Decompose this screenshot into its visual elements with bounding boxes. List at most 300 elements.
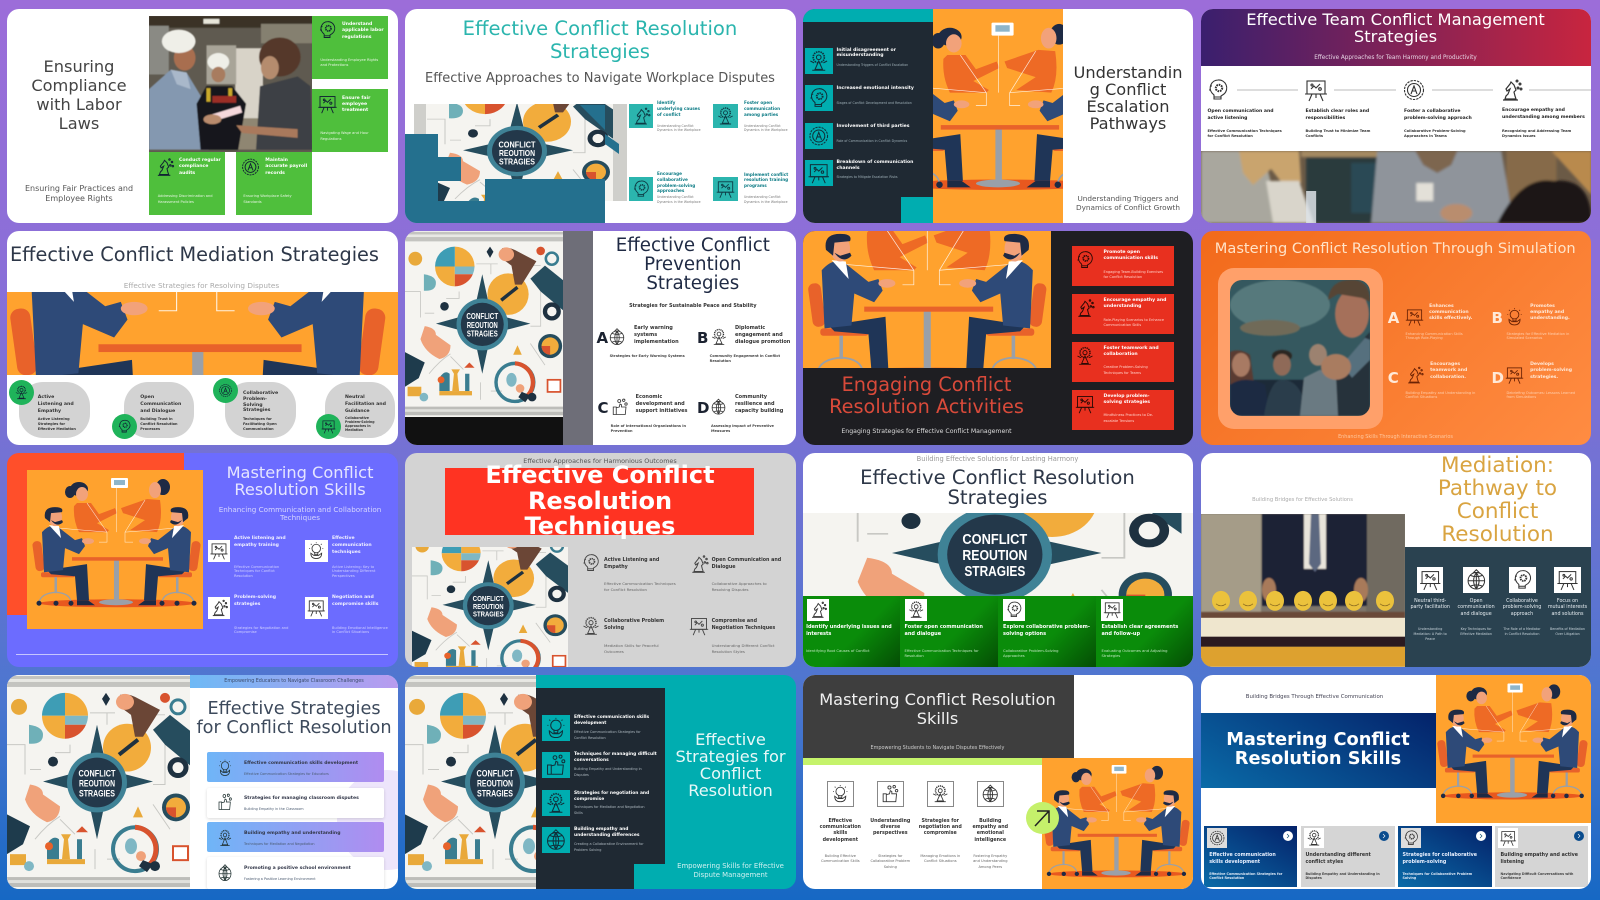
title [616, 237, 770, 293]
text [38, 416, 76, 432]
text [320, 58, 378, 67]
heading [234, 594, 276, 608]
text: Effective Mediation [38, 426, 76, 430]
icon [1504, 307, 1524, 327]
heading: Maintain [265, 158, 288, 163]
title: Pathways [1090, 114, 1166, 133]
text [904, 648, 979, 658]
gray band [563, 231, 593, 445]
text: Creative Problem-Solving [1104, 365, 1148, 369]
text [1104, 413, 1153, 424]
icon box [877, 781, 904, 807]
heading [836, 48, 896, 58]
illustration: conflict poster: REOUTION [79, 778, 115, 789]
text: Navigating Wage and Hour [320, 131, 369, 135]
heading: Foster a collaborative [1404, 109, 1461, 114]
lime band [802, 758, 1042, 765]
text: Dynamics Issues [1502, 134, 1536, 138]
card 2 [1300, 826, 1394, 887]
photo frame [1218, 268, 1382, 429]
text [1102, 648, 1167, 658]
label: Understanding [870, 818, 910, 824]
heading [1104, 250, 1158, 263]
label: and solutions [1551, 612, 1584, 617]
icon: handshake [611, 398, 629, 416]
text [657, 195, 701, 204]
heading [604, 558, 659, 572]
heading: Identify underlying issues and [806, 624, 892, 630]
heading [179, 158, 221, 176]
icon badge 2 [112, 414, 136, 439]
text [345, 416, 375, 432]
heading: interests [806, 631, 831, 637]
text: Effective Communication Strategies for Educators [244, 772, 329, 776]
label: empathy and [973, 825, 1008, 830]
icon card [1463, 567, 1489, 593]
text: Dynamics in the Workplace [744, 200, 788, 204]
text: Fostering Empathy [973, 854, 1007, 858]
illustration: table close-up [7, 292, 398, 375]
heading [265, 158, 307, 176]
icon tile [542, 752, 570, 778]
heading [234, 535, 286, 549]
title: Effective [695, 730, 766, 748]
letter C: C [1388, 369, 1399, 387]
text [744, 195, 788, 204]
subtitle: Enhancing Communication and Collaboration [219, 505, 381, 514]
text: Approaches in [345, 424, 371, 428]
heading: teamwork and [1430, 368, 1467, 373]
title: Resolution Skills [234, 480, 366, 499]
heading: Explore collaborative problem- [1003, 624, 1090, 630]
title: Compliance [31, 76, 127, 95]
text: Mediation Skills for Peaceful [604, 643, 659, 648]
title: Pathway to [1438, 476, 1557, 500]
title: Effective Conflict [485, 461, 715, 489]
text: Outcomes [604, 649, 624, 654]
heading: of conflict [657, 112, 681, 117]
text [1104, 365, 1148, 376]
subtitle: Empowering Skills for Effective [677, 862, 784, 870]
green column 4 [1096, 596, 1193, 667]
card: Open Communication [124, 382, 194, 438]
text: Understanding Different [332, 569, 375, 573]
subtitle: Strategies for Sustainable Peace and Stability [629, 303, 757, 309]
text [1500, 872, 1573, 880]
text: Among Peers [978, 865, 1002, 869]
label: negotiation and [919, 825, 962, 830]
text [574, 805, 645, 817]
green column 1 [802, 596, 900, 667]
text: Understanding Conflict [657, 195, 694, 199]
heading [345, 395, 386, 416]
heading: Communication [140, 402, 181, 407]
heading: collaboration. [1430, 375, 1466, 380]
heading: skills development [1209, 860, 1260, 865]
heading: Effective communication [1209, 853, 1276, 858]
text: Identifying Root Causes of Conflict [806, 648, 870, 652]
heading: channels [836, 166, 860, 171]
heading: Building empathy and understanding [244, 831, 340, 836]
heading: records [265, 171, 285, 176]
text: Active Listening: Key to [332, 564, 374, 568]
title: for Conflict Resolution [196, 718, 392, 738]
heading [1104, 346, 1159, 358]
text: Techniques for Teams [1104, 371, 1141, 375]
red banner [445, 468, 754, 535]
letter A: A [596, 329, 608, 347]
icon card [1100, 599, 1123, 621]
text [657, 124, 701, 132]
label [1410, 599, 1450, 612]
heading: communication skills [1104, 256, 1158, 261]
text: Understanding Conflict [657, 124, 694, 128]
text: Conflict Resolution [574, 736, 606, 740]
icon [1074, 346, 1094, 366]
top text: Effective Approaches for Harmonious Outcomes [523, 457, 677, 465]
subtitle: Effective Approaches to Navigate Workplace Disputes [425, 70, 775, 86]
title [675, 730, 786, 799]
icon tile 2 [805, 85, 832, 111]
icon card [1417, 567, 1443, 593]
illustration: conflict poster: STRAGIES [467, 330, 498, 339]
heading [735, 394, 783, 415]
label: Open [1470, 599, 1482, 604]
text: Managing Emotions in [920, 854, 960, 858]
text [712, 581, 767, 593]
heading: and dialogue [904, 631, 941, 637]
heading: communication [1429, 310, 1469, 315]
icon card [208, 540, 230, 562]
icon card [905, 599, 927, 621]
panel: Ensuring Compliance with Labor Laws [7, 8, 398, 222]
text [234, 626, 288, 635]
text: Building Empathy and Understanding in [1406, 390, 1475, 394]
card: Neutral Facilitation [325, 382, 395, 438]
dark header [802, 675, 1074, 758]
heading [1530, 362, 1572, 381]
text: Dynamics in the Workplace [657, 200, 701, 204]
title: with Labor [36, 95, 122, 114]
subtitle: Engaging Strategies for Effective Conflict Management [841, 428, 1012, 435]
heading: accurate payroll [265, 164, 307, 169]
letter B: B [1492, 309, 1503, 327]
connector lines [1237, 90, 1591, 91]
icon [581, 553, 601, 573]
panel: Effective Conflict Resolution Strategies green [802, 453, 1193, 667]
icon tile 1 [628, 104, 653, 128]
text: Problem-Solving [345, 420, 375, 424]
heading [836, 160, 914, 171]
title: Mediation: [1441, 453, 1554, 478]
title: Resolution Activities [829, 395, 1024, 418]
text [1406, 390, 1475, 399]
heading [1404, 108, 1472, 121]
icon badge 4 [316, 414, 340, 439]
label: Collaborative [1506, 599, 1538, 604]
illustration: conflict poster: REOUTION [467, 321, 498, 330]
heading: conversations [574, 758, 609, 763]
heading: Negotiation Techniques [712, 626, 775, 631]
icon tile [542, 827, 570, 853]
text: Techniques for Collaborative Problem [1402, 872, 1472, 876]
text: Key Techniques for [1461, 626, 1492, 630]
red block [7, 453, 184, 615]
heading: Diplomatic [735, 324, 765, 330]
arrow badge [1476, 831, 1486, 841]
icon [689, 616, 709, 636]
title: Strategies [1354, 27, 1437, 46]
heading: Develop problem- [1104, 394, 1150, 399]
text: Standards [243, 200, 262, 204]
icon: chess knight [158, 158, 174, 176]
title: Prevention [644, 254, 741, 275]
dark info panel [1404, 547, 1591, 667]
heading: Active [38, 395, 54, 400]
text: Harassment Policies [158, 200, 194, 204]
letter C: C [598, 399, 609, 417]
black base [405, 417, 563, 445]
heading [38, 395, 74, 416]
text: Understanding Conflict [744, 195, 781, 199]
title: Ensuring [44, 57, 114, 76]
icon [216, 793, 232, 811]
icon card [1554, 567, 1581, 593]
heading: conflict styles [1306, 860, 1343, 865]
title [1074, 62, 1182, 133]
heading [1306, 108, 1369, 121]
title: Understandin [1074, 62, 1182, 82]
green column 2 [900, 596, 998, 667]
arrow badge [1379, 831, 1389, 841]
top band [190, 675, 398, 688]
icon card [208, 597, 230, 619]
heading [574, 827, 639, 839]
photo: man pointing [1230, 280, 1370, 416]
text: Effective Communication [234, 564, 279, 568]
illustration: conflict poster: STRAGIES [477, 788, 513, 799]
text: Building Empathy in the Classroom [244, 807, 304, 811]
illustration: compass close-up: CONFLICT [962, 531, 1027, 548]
heading: Implement conflict [744, 172, 788, 176]
text [574, 842, 644, 854]
text: Role of International Organizations in [611, 424, 686, 428]
text: Resolution Styles [712, 649, 745, 654]
heading: empathy training [234, 543, 279, 548]
heading [1429, 304, 1472, 323]
title [1438, 454, 1557, 546]
heading [604, 619, 664, 633]
illustration: meeting [802, 231, 1050, 368]
text: Techniques for Mediation and Negotiation [244, 842, 315, 846]
text [710, 354, 780, 364]
icon [1209, 79, 1228, 100]
title: Conflict [1457, 498, 1538, 524]
text: for Conflict Resolution [604, 587, 647, 592]
text: Effective Mediation [1460, 632, 1492, 636]
heading [243, 391, 278, 414]
icon card [1400, 828, 1421, 848]
heading: understanding [1104, 304, 1141, 309]
top text: Building Effective Solutions for Lasting Harmony [917, 455, 1078, 463]
subtitle [1076, 194, 1180, 212]
heading: problem-solving [657, 182, 695, 188]
label: communication [820, 825, 861, 830]
heading: Develops [1530, 362, 1554, 367]
heading: Solving [604, 626, 624, 631]
text: Active Listening [38, 416, 70, 420]
heading: listening [1500, 860, 1524, 865]
label [820, 818, 861, 844]
illustration: conflict poster with tiles: STRAGIES [499, 157, 535, 166]
text: Collaborative Problem-Solving [1003, 648, 1059, 652]
text: Strategies for Effective Mediation in [1506, 332, 1569, 336]
text [604, 643, 659, 655]
label: skills [833, 831, 847, 836]
heading: resilience and [735, 401, 775, 407]
text: Building Trust to Minimize Team [1306, 128, 1370, 132]
heading: compromise skills [332, 602, 378, 606]
label: mutual interests [1548, 605, 1587, 610]
heading [1209, 852, 1276, 866]
icon: globe [710, 398, 727, 416]
card 4 [207, 857, 384, 889]
label: and dialogue [1461, 612, 1492, 617]
heading: Open [140, 395, 154, 400]
photo: team at table [1200, 150, 1591, 222]
text: Through Role-Playing [1406, 336, 1443, 340]
heading: Encourages [1430, 362, 1460, 367]
title [463, 17, 737, 63]
text: Problem Solving [574, 848, 601, 852]
text: Measures [711, 429, 730, 433]
card: Collaborative [225, 382, 296, 438]
illustration: conflict poster [405, 231, 563, 417]
label: approach [1511, 612, 1533, 617]
heading: Promoting a positive school environment [244, 866, 351, 871]
title: Mastering Conflict [227, 463, 373, 482]
text [920, 854, 960, 865]
heading: Compromise and [712, 619, 757, 624]
title: Engaging Conflict [842, 373, 1011, 396]
red card 2 [1072, 294, 1174, 334]
heading: Understanding different [1306, 853, 1371, 858]
illustration: conflict poster with tiles [414, 104, 627, 201]
heading: and Dialogue [140, 409, 175, 414]
icon [1074, 250, 1094, 270]
text: Benefits of Mediation [1550, 626, 1585, 630]
heading: Empathy [38, 409, 61, 414]
text [1502, 128, 1571, 138]
heading [1102, 624, 1178, 638]
icon: gear circle [242, 158, 259, 176]
icon box [927, 781, 954, 807]
heading: development and [636, 401, 685, 407]
text: Techniques for Mediation and Negotiation [574, 805, 645, 809]
panel: Mastering Conflict Resolution Through Simulation [1200, 231, 1591, 445]
text: Collaborative Problem [870, 859, 910, 863]
text: Understanding Different Conflict [712, 643, 775, 648]
text [821, 854, 860, 865]
illustration: meeting [26, 470, 202, 629]
photo: workers in hard hats [149, 16, 312, 152]
heading: strategies [234, 602, 260, 606]
heading [342, 96, 370, 113]
green card 4 [236, 152, 312, 215]
icon badge 3 [213, 378, 238, 402]
icon: figure [710, 328, 728, 346]
text: Disputes [574, 773, 589, 777]
icon: globe [608, 328, 626, 346]
text: Conflict Resolution [140, 422, 178, 426]
text: Solving [1402, 876, 1416, 880]
text: and Protections [320, 63, 348, 67]
title: Effective Conflict [616, 235, 770, 256]
text [140, 416, 178, 432]
text: Role of Communication in Conflict Dynamics [836, 138, 907, 142]
subtitle: Understanding Triggers and [1077, 194, 1179, 203]
text: Building Effective [825, 854, 856, 858]
letter D: D [1492, 369, 1504, 387]
icon [1498, 78, 1522, 102]
heading [140, 395, 181, 416]
letter B: B [697, 329, 708, 347]
heading [744, 172, 788, 188]
title: Mastering Conflict Resolution Through Simulation [1215, 240, 1576, 257]
label: compromise [924, 831, 957, 836]
label [1503, 599, 1541, 618]
heading [712, 558, 781, 572]
text: Facilitating Open [243, 422, 277, 426]
icon card [305, 597, 328, 619]
heading [1104, 394, 1150, 406]
text: Communication [243, 426, 274, 430]
heading: among parties [744, 112, 778, 117]
text: Strategies for [38, 422, 65, 426]
icon [216, 829, 232, 847]
text: Collaborative [345, 416, 369, 420]
letter D: D [697, 399, 709, 417]
heading: Collaborative [243, 391, 278, 396]
title [1246, 10, 1545, 46]
red card 4 [1072, 390, 1174, 430]
heading: Understand [342, 22, 372, 27]
heading: Effective communication skills [574, 715, 649, 720]
subtitle: Ensuring Fair Practices and [25, 184, 133, 192]
panel: Understanding Conflict Escalation Pathways [802, 8, 1193, 222]
heading [1402, 852, 1477, 866]
title [829, 374, 1024, 419]
panel: Mastering Conflict Resolution Skills dark header [802, 675, 1193, 889]
heading: Guidance [345, 409, 370, 414]
heading: Strategies for collaborative [1402, 853, 1477, 858]
icon [216, 759, 232, 777]
title: Conflict [700, 764, 761, 783]
title: Resolution Skills [1235, 748, 1401, 769]
heading: Encourage empathy and [1502, 108, 1565, 113]
text: Building Empathy and Understanding in [574, 767, 642, 771]
title: Effective Conflict Mediation Strategies [10, 243, 379, 266]
icon [1404, 80, 1424, 100]
text [1414, 626, 1447, 642]
heading [1500, 852, 1578, 866]
heading [712, 619, 775, 633]
subtitle: Dynamics of Conflict Growth [1076, 202, 1180, 212]
title: Strategies [646, 273, 739, 294]
heading: dialogue promotion [735, 338, 790, 344]
text [870, 854, 910, 871]
heading [332, 594, 378, 608]
